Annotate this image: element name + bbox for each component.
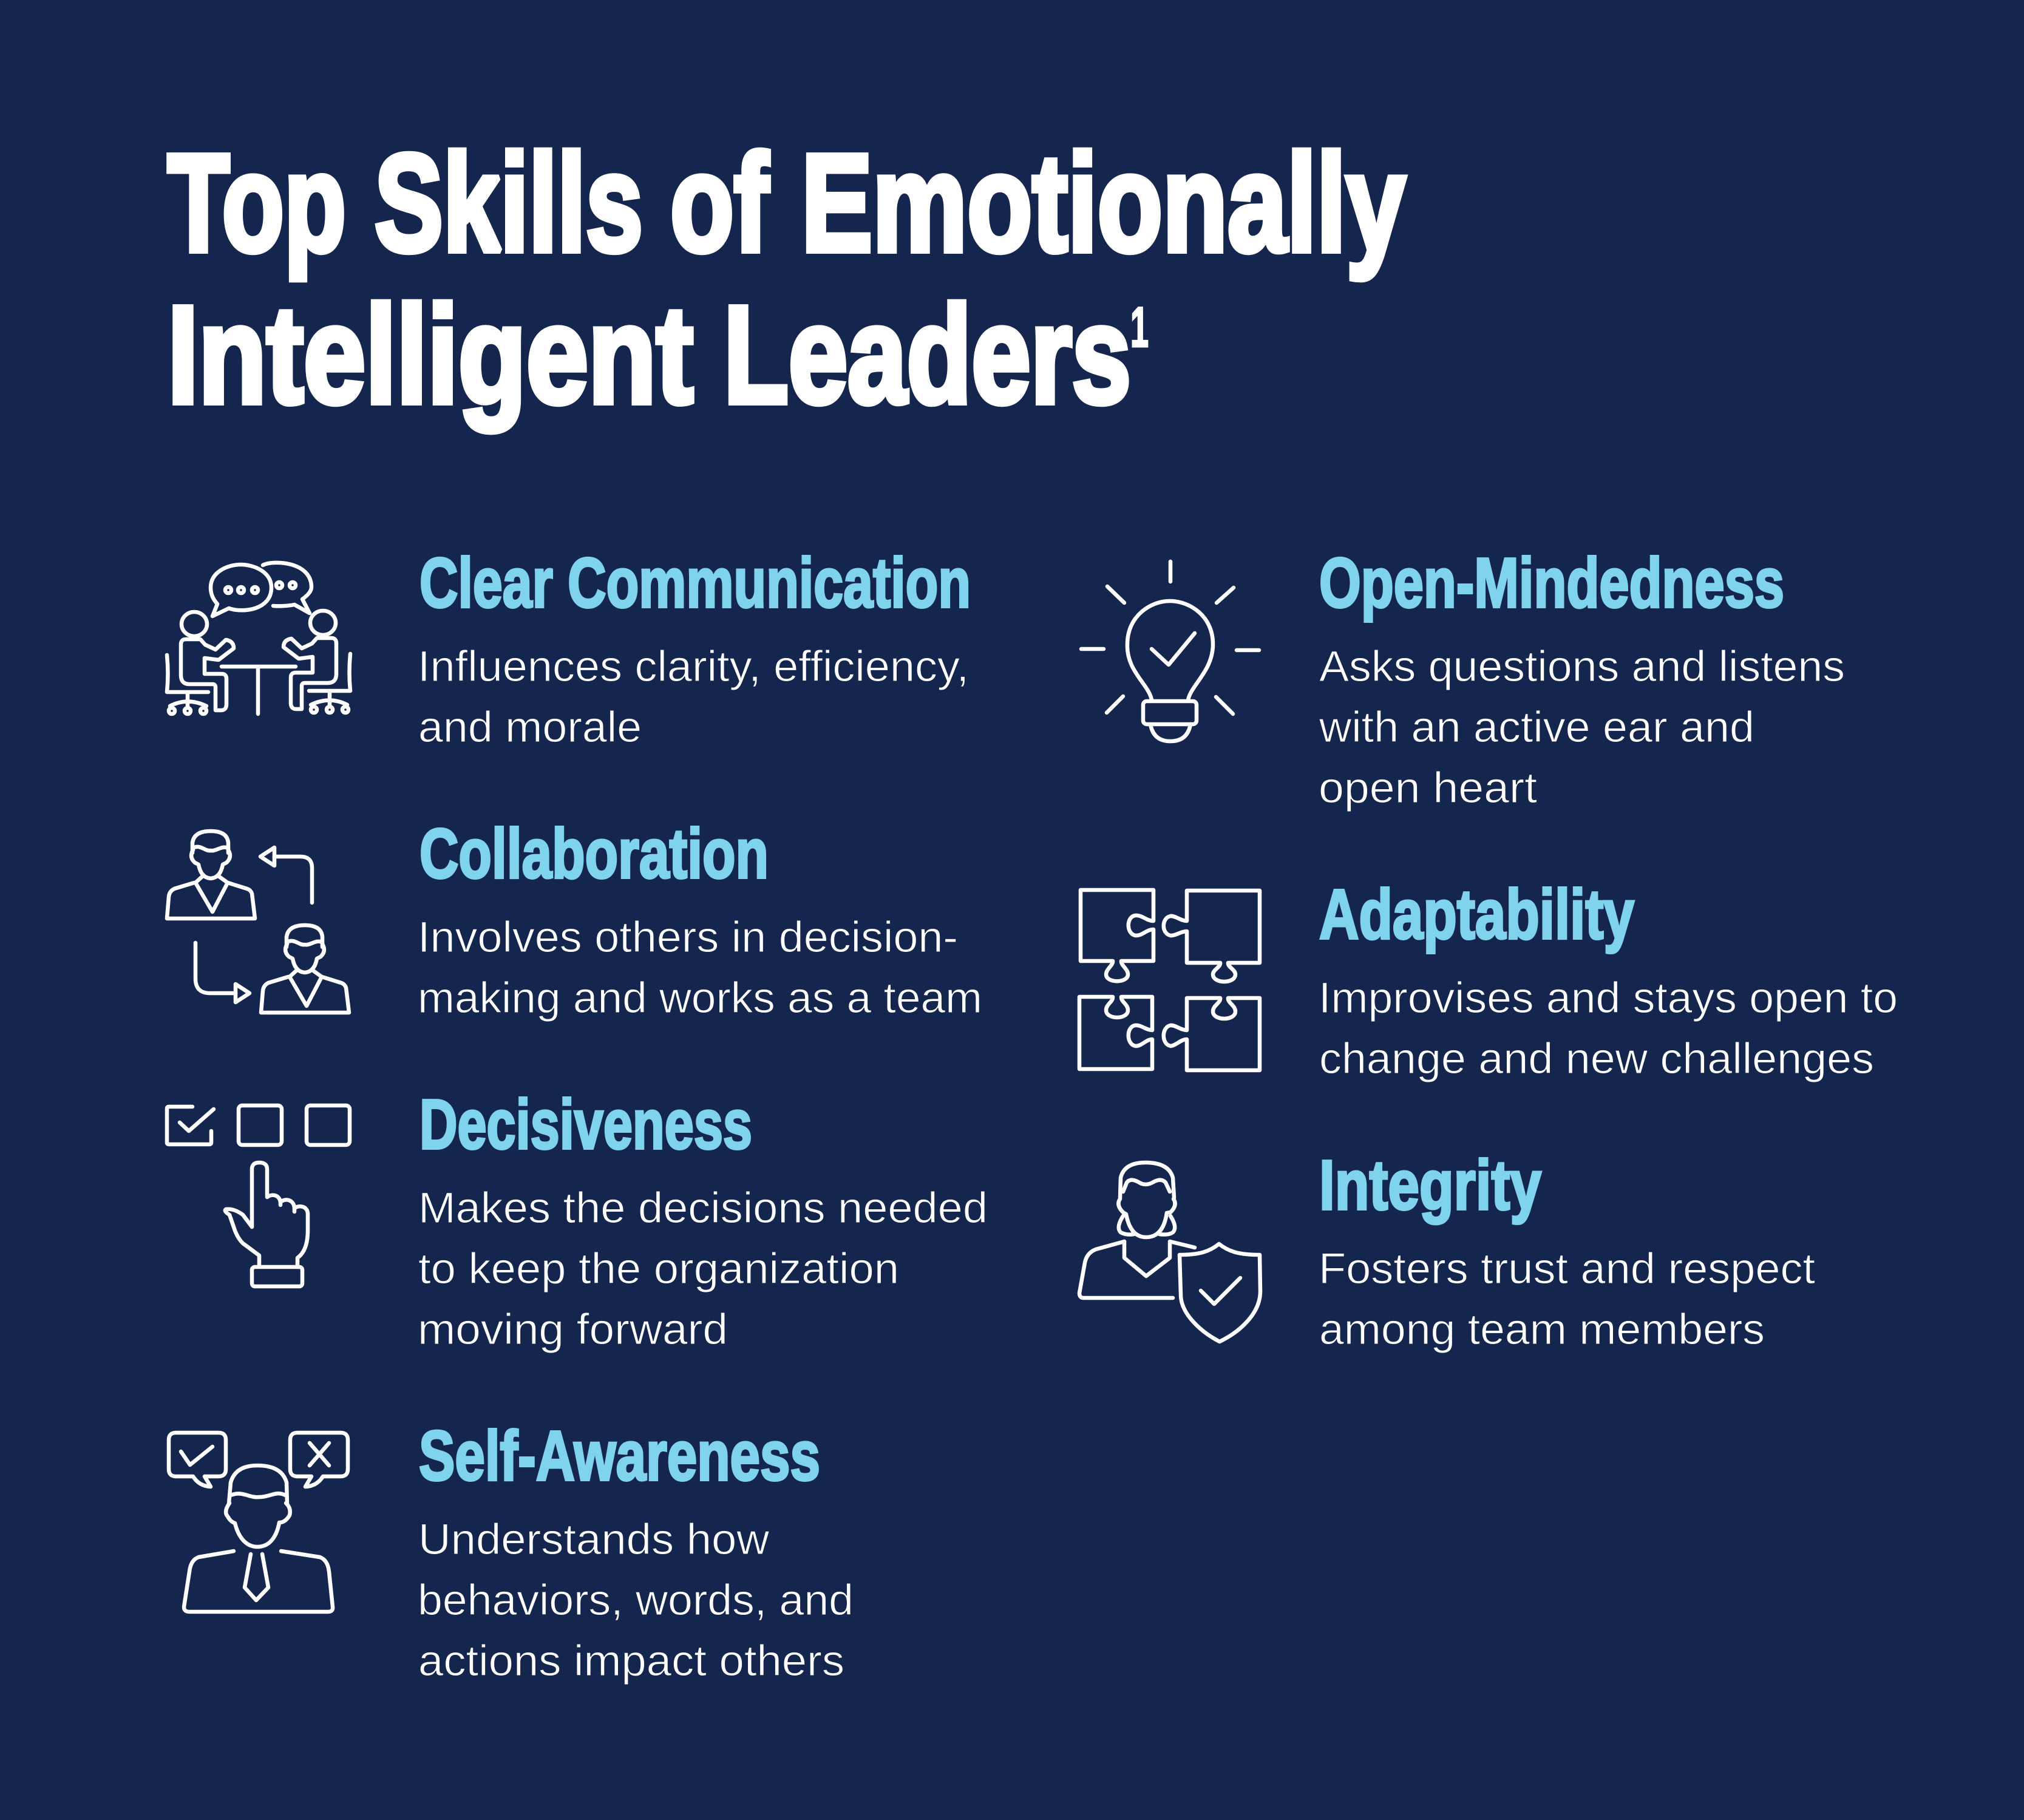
title: Leaders <box>724 278 1131 432</box>
heading: decisiveness: Decisiveness <box>419 1085 752 1164</box>
title: Skills <box>375 126 643 280</box>
title: Emotionally <box>801 126 1405 280</box>
text: clear communication description: Influences clarity, efficiency, <box>418 643 969 691</box>
heading: adaptability: Adaptability <box>1319 875 1634 954</box>
icon: two people talking at a table <box>167 563 350 714</box>
icon: hand choosing a checkbox <box>167 1105 350 1286</box>
text: adaptability description: Improvises and stays open to <box>1319 974 1898 1022</box>
text: clear communication description: and morale <box>418 704 642 752</box>
text: collaboration description: Involves others in decision- <box>418 914 958 962</box>
icon: two people exchanging with arrows <box>167 831 349 1013</box>
heading: collaboration: Collaboration <box>419 814 769 893</box>
panel: self-awareness <box>169 1416 854 1685</box>
heading: self-awareness: Self-Awareness <box>419 1416 820 1495</box>
icon: four puzzle pieces <box>1079 890 1260 1070</box>
text: clear communication description <box>418 643 969 752</box>
text: adaptability description: change and new challenges <box>1319 1035 1874 1083</box>
text: self-awareness description <box>418 1516 854 1685</box>
heading: open-mindedness: Open-Mindedness <box>1319 543 1784 622</box>
text: open-mindedness description: open heart <box>1319 764 1537 812</box>
text: self-awareness description: behaviors, words, and <box>418 1577 854 1625</box>
text: decisiveness description <box>418 1184 988 1354</box>
text: self-awareness description: Understands how <box>418 1516 770 1564</box>
panel: decisiveness <box>167 1085 988 1354</box>
text: collaboration description <box>418 914 982 1022</box>
text: self-awareness description: actions impact others <box>418 1637 844 1685</box>
text: decisiveness description: to keep the organization <box>418 1245 899 1293</box>
text: adaptability description <box>1319 974 1898 1083</box>
title: Intelligent <box>168 278 693 432</box>
text: open-mindedness description <box>1319 643 1845 812</box>
icon: person with approve and reject speech bubbles <box>169 1433 348 1612</box>
heading: integrity: Integrity <box>1319 1146 1541 1224</box>
text: open-mindedness description: Asks questions and listens <box>1319 643 1845 691</box>
title: Top <box>168 126 346 280</box>
text: decisiveness description: moving forward <box>418 1306 728 1354</box>
panel: collaboration <box>167 814 982 1022</box>
panel: adaptability <box>1079 875 1898 1083</box>
text: collaboration description: making and works as a team <box>418 974 982 1022</box>
text: decisiveness description: Makes the decisions needed <box>418 1184 988 1232</box>
icon: person with shield and check mark <box>1079 1163 1260 1342</box>
panel: open-mindedness <box>1081 543 1845 812</box>
text: integrity description <box>1319 1245 1815 1354</box>
panel: integrity <box>1079 1146 1815 1354</box>
title: 1 <box>1130 295 1149 359</box>
title <box>168 126 1405 432</box>
text: integrity description: Fosters trust and respect <box>1319 1245 1815 1293</box>
heading: clear communication: Clear Communication <box>419 543 971 622</box>
panel: clear communication <box>167 543 971 752</box>
icon: light bulb with check mark <box>1081 562 1259 741</box>
text: integrity description: among team members <box>1319 1306 1765 1354</box>
title: of <box>670 126 769 280</box>
text: open-mindedness description: with an active ear and <box>1319 704 1754 752</box>
